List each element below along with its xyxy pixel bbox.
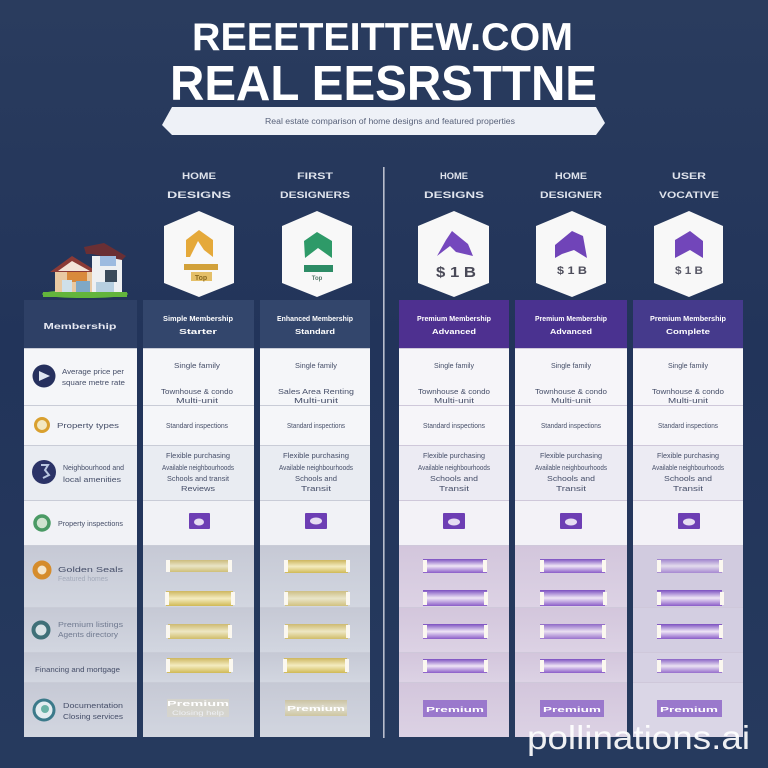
row label seven: Financing and mortgage <box>35 665 120 674</box>
panel: column one gold: Closing help <box>172 710 225 717</box>
panel: column five purple: Single family <box>668 361 708 370</box>
hexagon badge: purple three: $ 1 B <box>675 265 703 277</box>
row label three <box>63 463 124 484</box>
column titles: FIRST <box>297 171 334 181</box>
row label five: Golden Seals <box>58 565 123 574</box>
header: label column <box>24 300 137 348</box>
icon: orange dot <box>35 563 49 577</box>
panel: column three purple: Standard inspections <box>423 421 485 430</box>
panel: column two green: Standard inspections <box>287 421 345 430</box>
panel: column five purple: Multi-unit <box>668 396 709 405</box>
row label two: Property types <box>57 421 119 430</box>
panel: column four purple: Available neighbourhoods <box>535 463 607 472</box>
panel: column three purple: Transit <box>439 484 470 493</box>
panel: column two green: Multi-unit <box>294 396 339 405</box>
panel: column two green: Premium <box>287 706 345 713</box>
hexagon badge: purple three <box>654 211 723 297</box>
row label six <box>58 620 123 639</box>
hexagon badge: purple one <box>418 211 489 297</box>
bar end caps <box>165 560 724 672</box>
icon: teal ring <box>34 622 48 638</box>
icon: navy globe <box>32 460 56 484</box>
panel: column two green: Enhanced Membership <box>277 316 353 323</box>
panel: column one gold: Simple Membership <box>163 316 233 323</box>
panel: column four purple: Premium Membership <box>535 316 607 323</box>
hexagon badge: gold: Top <box>195 275 207 282</box>
panel: column four purple: Single family <box>551 361 591 370</box>
panel: row labels column <box>24 300 137 737</box>
panel: column three purple: Schools and <box>430 474 478 483</box>
panel: column five purple: Schools and <box>664 474 712 483</box>
panel: column one gold: Single family <box>174 361 220 370</box>
panel: column five purple: Available neighbourhoods <box>652 463 724 472</box>
title: site name: REEETEITTEW.COM <box>192 16 573 59</box>
panel: column five purple <box>633 300 743 737</box>
row label one <box>62 367 125 387</box>
icon: teal badge <box>34 700 54 720</box>
panel: column four purple: Standard inspections <box>541 421 601 430</box>
panel: column four purple: Premium <box>543 707 601 714</box>
hexagon badge: purple two <box>536 211 606 297</box>
panel: column three purple: Single family <box>434 361 474 370</box>
panel: column five purple: Standard inspections <box>658 421 718 430</box>
panel: column two green: Sales Area Renting <box>278 387 354 396</box>
panel: column three purple: Townhouse & condo <box>418 387 490 396</box>
column titles: DESIGNER <box>540 190 603 200</box>
row label one: Average price per <box>62 367 125 376</box>
row label three: local amenities <box>63 475 121 484</box>
row label five <box>58 565 123 583</box>
subtitle banner: Real estate comparison of home designs and featured properties <box>265 117 515 126</box>
hexagon badge: green: Top <box>312 276 323 282</box>
panel: column four purple: Transit <box>556 484 587 493</box>
column titles: HOME <box>555 171 587 181</box>
row label eight: Documentation <box>63 701 123 710</box>
header: label column: Membership <box>44 322 117 331</box>
panel: column four purple: Flexible purchasing <box>540 451 602 460</box>
panel: column two green: Flexible purchasing <box>283 451 349 460</box>
row label one: square metre rate <box>62 378 125 387</box>
panel: column one gold: Schools and transit <box>167 474 230 483</box>
row label six: Agents directory <box>58 630 118 639</box>
subtitle banner <box>162 107 605 135</box>
panel: column three purple <box>399 300 509 737</box>
watermark: pollinations.ai <box>527 719 750 756</box>
hexagon badge: purple two: $ 1 B <box>557 265 587 277</box>
row label eight: Closing services <box>63 712 123 721</box>
panel: column two green: Schools and <box>295 474 337 483</box>
title: main heading: REAL EESRSTTNE <box>170 57 597 111</box>
panel: column five purple: Complete <box>666 329 710 336</box>
panel: column three purple: Available neighbourhoods <box>418 463 490 472</box>
panel: column five purple: Premium Membership <box>650 316 726 323</box>
row label four: Property inspections <box>58 519 123 528</box>
row label five: Featured homes <box>58 574 108 583</box>
row label three: Neighbourhood and <box>63 463 124 472</box>
column titles: HOME <box>440 171 468 181</box>
panel: column one gold: Standard inspections <box>166 421 228 430</box>
panel: column four purple: Multi-unit <box>551 396 592 405</box>
panel: column three purple: Flexible purchasing <box>423 451 485 460</box>
panel: column five purple: Transit <box>673 484 704 493</box>
panel: column one gold: Townhouse & condo <box>161 387 233 396</box>
column titles: DESIGNS <box>424 190 484 200</box>
panel: column three purple: Advanced <box>432 329 476 336</box>
panel: column two green: Single family <box>295 361 337 370</box>
panel: column five purple: Townhouse & condo <box>652 387 724 396</box>
row label six: Premium listings <box>58 620 123 629</box>
hexagon badge: purple one: $ 1 B <box>436 264 476 281</box>
column titles: USER <box>672 171 707 181</box>
panel: column two green: Standard <box>295 329 335 336</box>
icon: green ring <box>35 516 49 530</box>
panel: column three purple: Premium <box>426 707 484 714</box>
panel: column one gold: Flexible purchasing <box>166 451 230 460</box>
panel: column three purple: Premium Membership <box>417 316 491 323</box>
column titles: DESIGNS <box>167 190 231 200</box>
panel: column five purple: Premium <box>660 707 718 714</box>
panel: column one gold: Starter <box>179 329 217 336</box>
hexagon badge: green <box>282 211 352 297</box>
icon: gold ring <box>36 418 48 432</box>
panel: column five purple: Flexible purchasing <box>657 451 719 460</box>
panel: column two green <box>260 300 370 737</box>
column titles: HOME <box>182 171 216 181</box>
panel: column three purple: Multi-unit <box>434 396 475 405</box>
column titles: VOCATIVE <box>659 190 719 200</box>
panel: column two green: Transit <box>301 484 332 493</box>
panel: column one gold: Multi-unit <box>176 396 219 405</box>
panel: column four purple: Schools and <box>547 474 595 483</box>
hexagon badge: gold <box>164 211 234 297</box>
icon: house illustration <box>42 243 128 298</box>
column divider <box>383 167 385 738</box>
panel: column four purple <box>515 300 627 737</box>
row label eight <box>63 701 123 721</box>
panel: column one gold: Premium <box>167 701 229 708</box>
panel: column two green: Available neighbourhoods <box>279 463 353 472</box>
panel: column one gold: Available neighbourhoods <box>162 463 234 472</box>
panel: column four purple: Townhouse & condo <box>535 387 607 396</box>
column titles <box>167 171 719 200</box>
panel: column four purple: Advanced <box>550 329 592 336</box>
rows background <box>24 348 137 737</box>
panel: column one gold <box>143 300 254 737</box>
icon: navy play <box>32 364 56 388</box>
column titles: DESIGNERS <box>280 190 350 200</box>
panel: column one gold: Reviews <box>181 484 215 493</box>
